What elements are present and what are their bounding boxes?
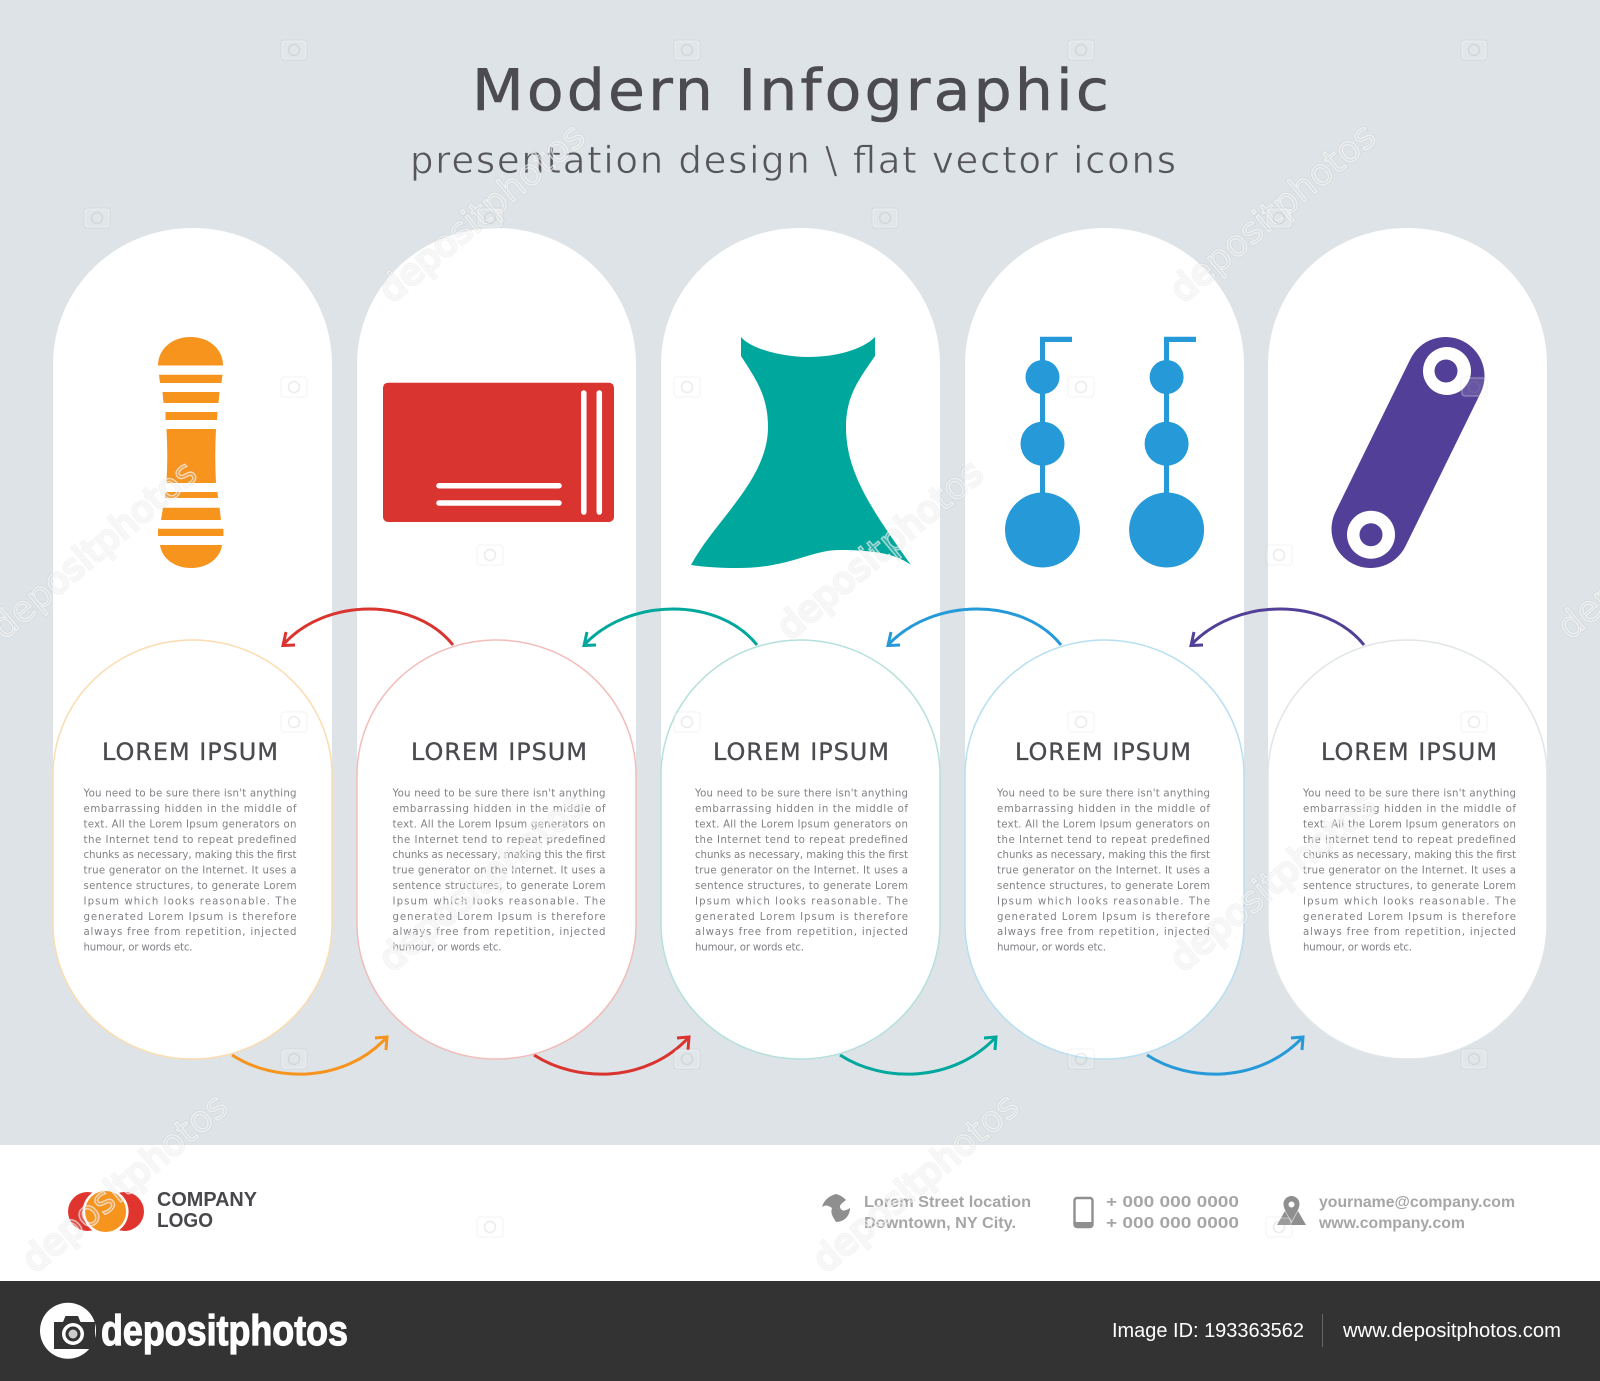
body text: text. All the Lorem Ipsum generators on [84,819,296,830]
watermarks: depositphotos [371,785,593,980]
body text: humour, or words etc. [997,943,1106,954]
heading: LOREM IPSUM [1015,738,1191,766]
icon: purple link strap [1347,347,1471,559]
body text: You need to be sure there isn't anything [694,789,908,800]
title: Modern Infographic [472,58,1112,124]
watermarks: depositphotos [1162,785,1384,980]
arrow: red forward [534,1037,689,1074]
contact: phone numbers: + 000 000 0000 [1106,1194,1239,1211]
logo text: COMPANY [157,1189,258,1211]
brand wordmark: depositphotos [101,1307,348,1355]
heading: LOREM IPSUM [713,738,889,766]
body text: always free from repetition, injected [695,927,908,938]
body text: sentence structures, to generate Lorem [1303,881,1516,892]
body text: chunks as necessary, making this the first [695,850,908,861]
body text: sentence structures, to generate Lorem [392,881,606,892]
body text: Ipsum which looks reasonable. The [695,896,908,907]
body text: always free from repetition, injected [392,927,606,938]
body text: the Internet tend to repeat predefined [695,835,908,846]
body text: sentence structures, to generate Lorem [84,881,297,892]
body text: embarrassing hidden in the middle of [1303,804,1516,815]
panel: text oval 2 [357,640,636,1059]
heading: LOREM IPSUM [102,738,278,766]
body text: You need to be sure there isn't anything [82,789,296,800]
icon: camera badge [40,1303,96,1359]
arrow: teal forward [840,1037,996,1074]
body text: humour, or words etc. [1303,943,1412,954]
arrow: blue forward [1147,1037,1303,1074]
icon: phone [1074,1198,1092,1227]
body text: You need to be sure there isn't anything [392,789,606,800]
body text: humour, or words etc. [84,943,192,954]
body text: generated Lorem Ipsum is therefore [392,912,606,923]
body text: embarrassing hidden in the middle of [695,804,908,815]
logo text: LOGO [157,1210,213,1232]
body text: the Internet tend to repeat predefined [997,835,1210,846]
body text: Ipsum which looks reasonable. The [997,896,1210,907]
body text: text. All the Lorem Ipsum generators on [392,819,606,830]
contact: web [1318,1194,1515,1232]
body text: embarrassing hidden in the middle of [997,804,1210,815]
watermarks: depositphotos [769,453,991,648]
website: www.depositphotos.com [1342,1320,1561,1342]
body text: embarrassing hidden in the middle of [392,804,606,815]
body text: You need to be sure there isn't anything [996,789,1210,800]
arrow: red back [283,609,453,646]
body text: always free from repetition, injected [84,927,296,938]
body text: true generator on the Internet. It uses a [1303,866,1516,877]
body text: always free from repetition, injected [997,927,1210,938]
watermarks: depositphotos [371,116,593,311]
body text: embarrassing hidden in the middle of [84,804,297,815]
arrow: blue back [888,609,1061,646]
body text: sentence structures, to generate Lorem [695,881,908,892]
body text [392,789,606,954]
contact: address: Downtown, NY City. [864,1215,1016,1232]
watermarks: depositphotos [1162,785,1384,980]
body text: Ipsum which looks reasonable. The [84,896,296,907]
panel: text oval 1 [53,640,332,1059]
contact: phone numbers [1106,1194,1239,1232]
icon: orange striped spool [158,337,224,568]
icon: red towel [383,383,614,522]
watermarks: depositphotos [805,1086,1027,1281]
watermarks: depositphotos [769,453,991,648]
icon: teal dress [691,337,911,568]
watermarks: depositphotos [1162,116,1384,311]
contact: address [864,1194,1031,1232]
body text: always free from repetition, injected [1303,927,1516,938]
body text: generated Lorem Ipsum is therefore [997,912,1210,923]
body text: true generator on the Internet. It uses a [392,866,606,877]
body text: You need to be sure there isn't anything [1302,789,1516,800]
logo text [157,1189,258,1232]
heading: LOREM IPSUM [411,738,587,766]
body text: true generator on the Internet. It uses a [695,866,908,877]
body text: chunks as necessary, making this the first [84,850,296,861]
body text [82,789,297,954]
body text: chunks as necessary, making this the first [997,850,1210,861]
contact: address: Lorem Street location [864,1194,1031,1211]
body text: Ipsum which looks reasonable. The [1303,896,1516,907]
body text: chunks as necessary, making this the first [1303,850,1516,861]
body text: generated Lorem Ipsum is therefore [695,912,908,923]
icon: map pin [1277,1196,1306,1225]
watermarks: depositphotos [805,1086,1027,1281]
body text: text. All the Lorem Ipsum generators on [695,819,908,830]
watermarks: depositphotos [1162,116,1384,311]
body text: the Internet tend to repeat predefined [84,835,296,846]
heading: LOREM IPSUM [1321,738,1497,766]
body text: sentence structures, to generate Lorem [997,881,1210,892]
body text: chunks as necessary, making this the first [392,850,606,861]
body text: generated Lorem Ipsum is therefore [84,912,296,923]
body text: true generator on the Internet. It uses a [84,866,296,877]
contact: web: yourname@company.com [1319,1194,1515,1211]
icon: globe [822,1194,850,1222]
body text: Ipsum which looks reasonable. The [392,896,606,907]
body text [996,789,1210,954]
footer band [0,1145,1600,1281]
arrow: purple back [1191,609,1364,646]
contact: phone numbers: + 000 000 0000 [1106,1215,1239,1232]
body text: the Internet tend to repeat predefined [392,835,606,846]
company logo [68,1188,258,1234]
body text: text. All the Lorem Ipsum generators on [1303,819,1516,830]
watermarks: depositphotos [371,785,593,980]
icon: blue earrings [1005,337,1204,568]
body text: generated Lorem Ipsum is therefore [1303,912,1516,923]
body text: the Internet tend to repeat predefined [1303,835,1516,846]
panel: text oval 4 [965,640,1244,1059]
body text: humour, or words etc. [695,943,804,954]
bottom attribution bar [0,1281,1600,1381]
subtitle: presentation design \ flat vector icons [410,139,1176,182]
panel: column backgrounds [53,228,1547,900]
body text: true generator on the Internet. It uses a [997,866,1210,877]
arrow: orange forward [232,1037,387,1074]
panel: text oval 5 [1268,640,1547,1059]
watermarks: depositphotos [371,116,593,311]
body text [1302,789,1516,954]
watermarks: depositphotos [14,1086,236,1281]
image id: Image ID: 193363562 [1112,1320,1304,1342]
panel: text oval 3 [661,640,940,1059]
body text [694,789,908,954]
arrow: teal back [584,609,757,646]
watermarks: depositphotos [14,1086,236,1281]
body text: text. All the Lorem Ipsum generators on [997,819,1210,830]
body text: humour, or words etc. [392,943,502,954]
contact: web: www.company.com [1318,1215,1465,1232]
